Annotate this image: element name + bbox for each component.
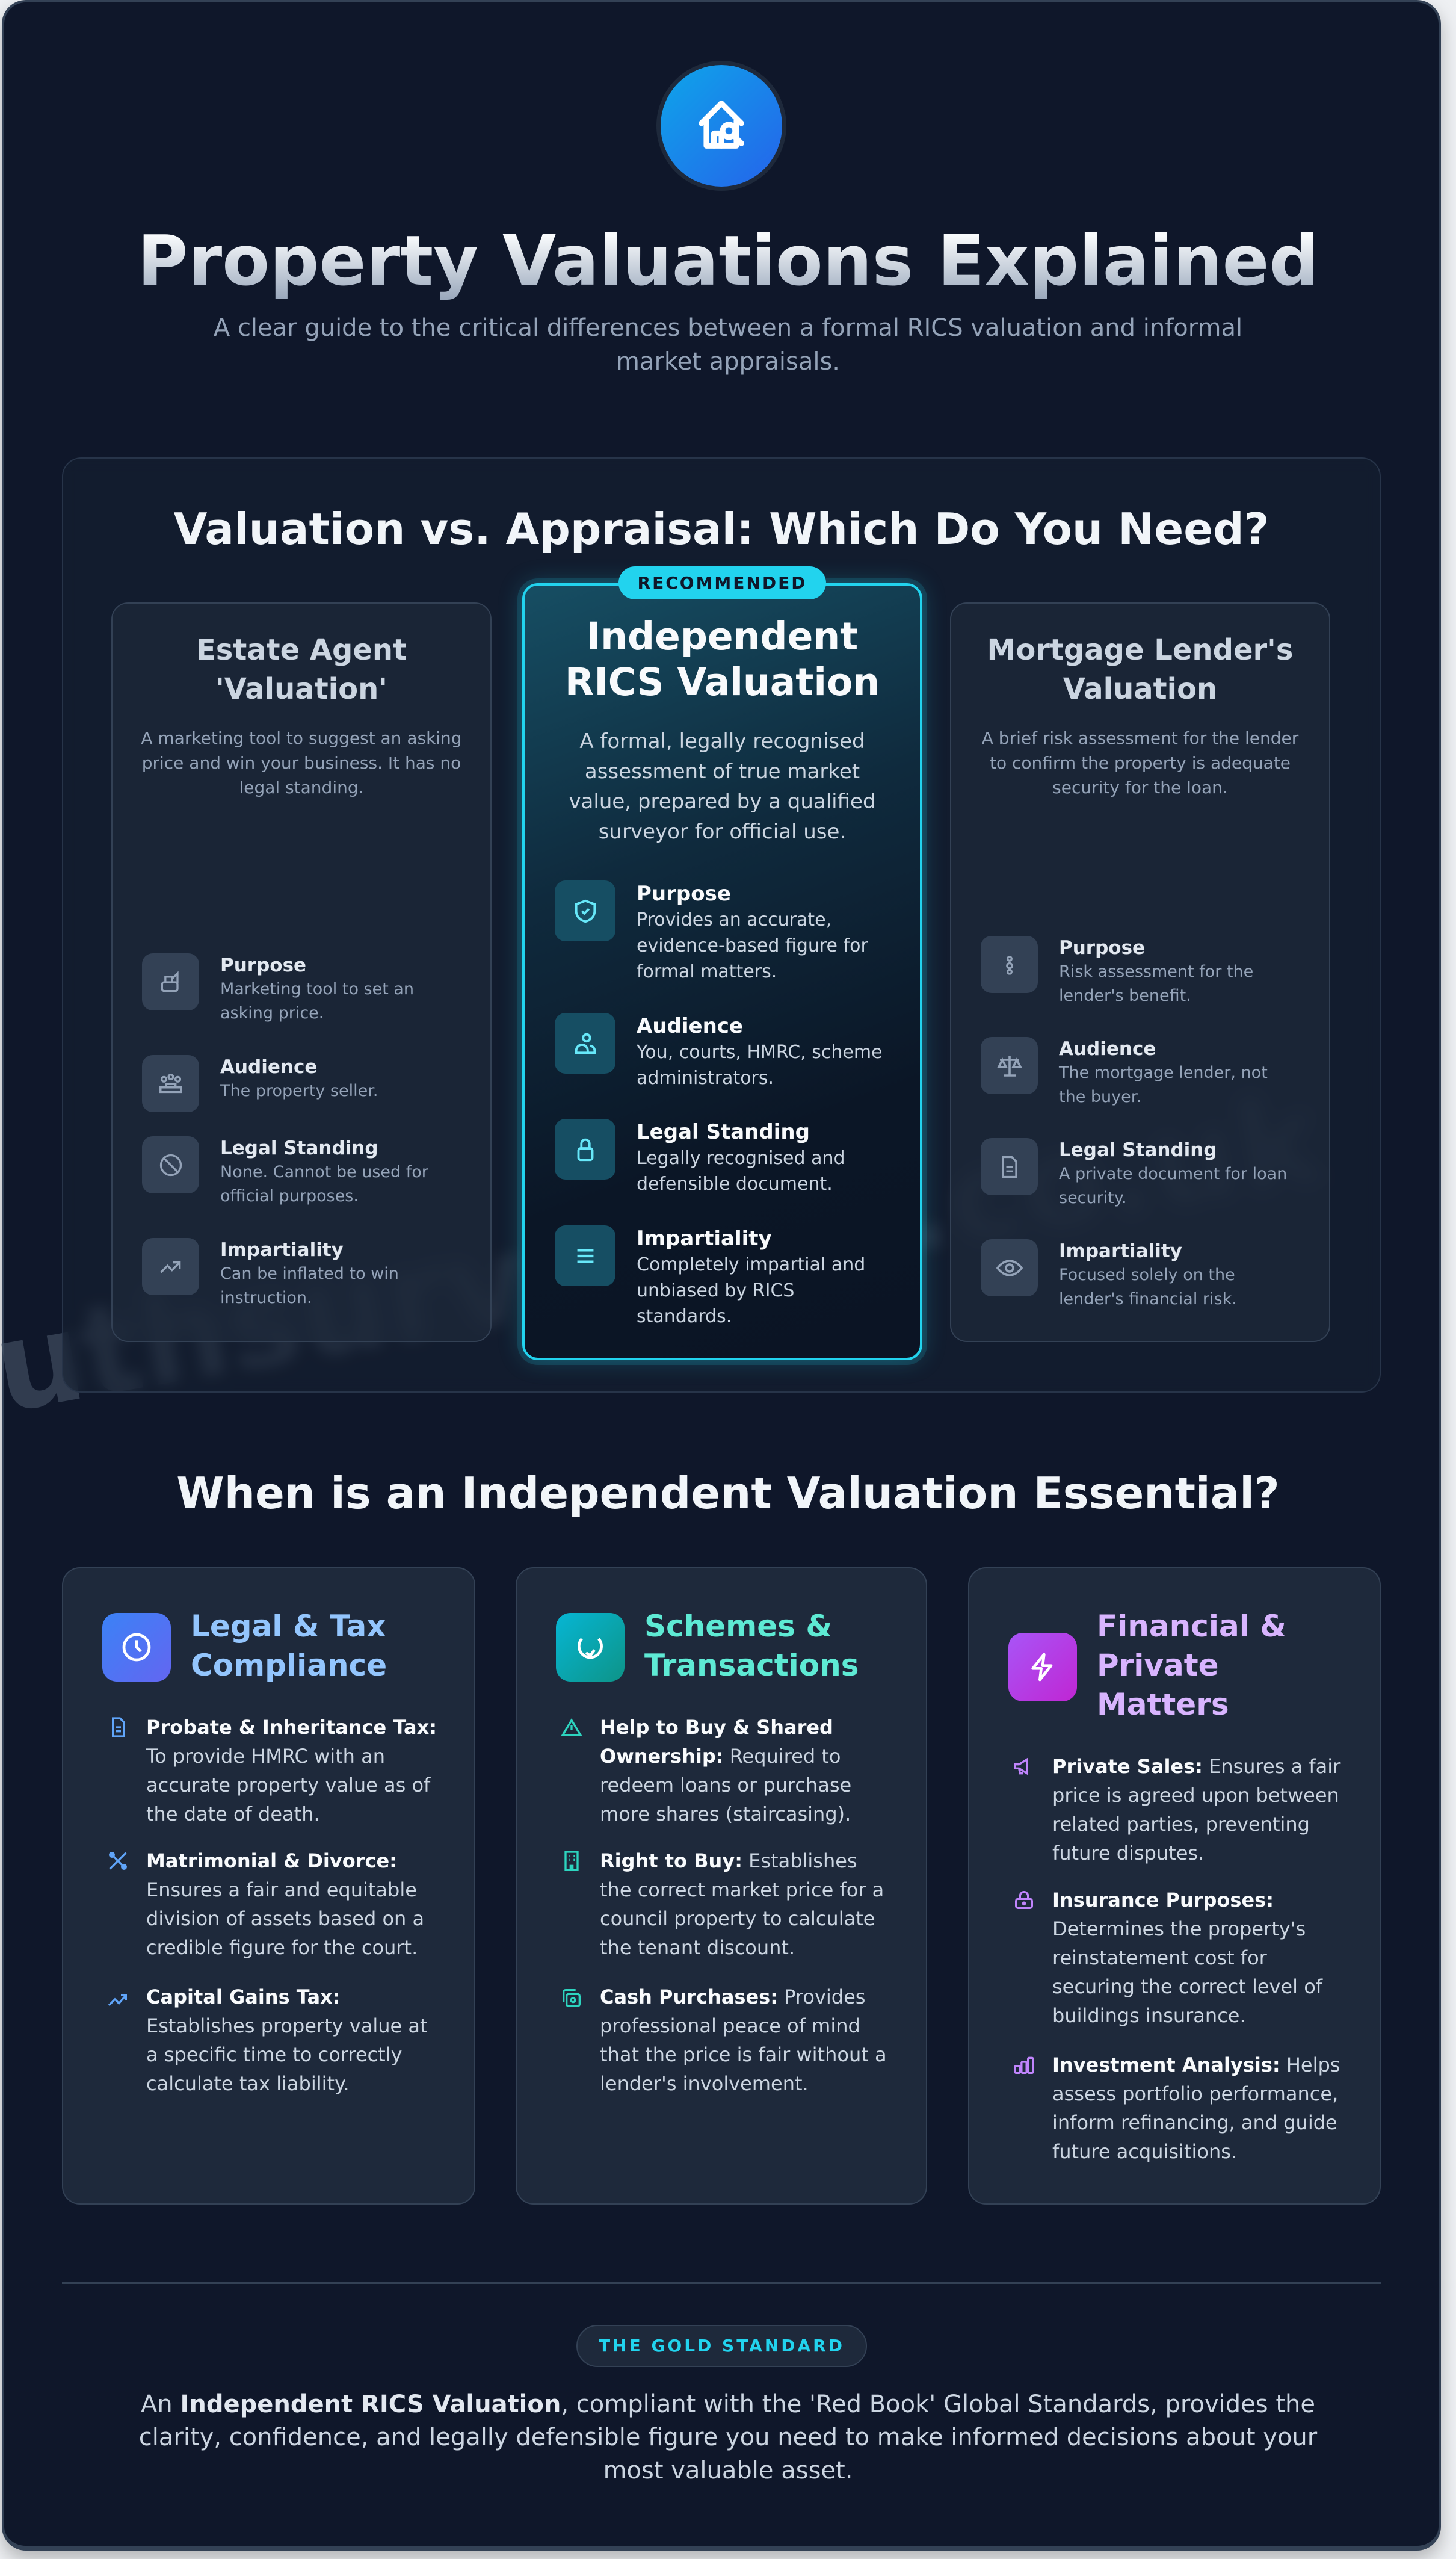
item: investment: inform refinancing, and guide: [1052, 2111, 1337, 2134]
item: impartiality: unbiased by RICS: [637, 1280, 794, 1301]
item: purpose: Marketing tool to set an: [220, 980, 414, 998]
card description: assessment of true market: [585, 760, 860, 784]
card title: Estate Agent: [196, 633, 407, 667]
item: impartiality: lender's financial risk.: [1059, 1290, 1237, 1308]
item: help to buy: [560, 1713, 915, 1828]
item: capital gains: calculate tax liability.: [146, 2072, 350, 2095]
item: purpose: [981, 936, 1253, 1005]
item: impartiality: instruction.: [220, 1289, 312, 1307]
card description: security for the loan.: [1052, 778, 1228, 797]
card title: Matters: [1097, 1687, 1229, 1722]
item: impartiality: [981, 1239, 1237, 1308]
subtitle: market appraisals.: [616, 348, 840, 376]
item: investment: future acquisitions.: [1052, 2140, 1237, 2163]
item: impartiality: [555, 1225, 865, 1327]
card: independent RICS valuation (recommended): [522, 583, 922, 1360]
card title: [644, 1607, 859, 1685]
icon: clock: [102, 1613, 171, 1682]
item: insurance: [1012, 1886, 1367, 2030]
item: impartiality: Can be inflated to win: [220, 1264, 399, 1283]
item: purpose: Risk assessment for the: [1059, 962, 1253, 981]
card title: [565, 614, 880, 704]
item: legal standing: [981, 1138, 1287, 1207]
item: purpose: Purpose: [637, 882, 731, 906]
subtitle: [214, 314, 1242, 376]
item: help to buy: redeem loans or purchase: [600, 1774, 851, 1796]
item: purpose: evidence-based figure for: [637, 935, 868, 956]
card description: A brief risk assessment for the lender: [982, 728, 1298, 748]
item: investment: assess portfolio performance,: [1052, 2082, 1338, 2105]
item: impartiality: Impartiality: [637, 1227, 772, 1251]
badge: the gold standard: THE GOLD STANDARD: [599, 2336, 845, 2356]
item: audience: Audience: [220, 1056, 317, 1078]
logo icon: house: [656, 61, 786, 191]
item: probate: Probate & Inheritance Tax:: [146, 1716, 437, 1739]
item: probate: the date of death.: [146, 1802, 320, 1825]
item: legal standing: A private document for loan: [1059, 1165, 1287, 1183]
item: private sales: future disputes.: [1052, 1842, 1204, 1864]
card title: 'Valuation': [215, 672, 387, 706]
card title: RICS Valuation: [565, 660, 880, 704]
item: impartiality: Completely impartial and: [637, 1254, 865, 1275]
item: audience: the buyer.: [1059, 1088, 1141, 1106]
item: audience: [981, 1037, 1268, 1106]
closing statement: [0, 2388, 1456, 2487]
item: purpose: [142, 953, 414, 1023]
item: right to buy: Right to Buy: Establishes: [600, 1849, 857, 1872]
item: audience: [555, 1013, 883, 1089]
item: impartiality: Impartiality: [220, 1239, 344, 1261]
badge: recommended: RECOMMENDED: [638, 573, 807, 593]
item: legal standing: [142, 1136, 428, 1205]
badge: the gold standard: [576, 2325, 867, 2367]
item: purpose: formal matters.: [637, 961, 777, 982]
item: private sales: [1012, 1752, 1367, 1867]
card title: Mortgage Lender's: [987, 633, 1293, 667]
closing statement: most valuable asset.: [603, 2457, 853, 2484]
item: audience: administrators.: [637, 1068, 774, 1089]
item: legal standing: Legally recognised and: [637, 1148, 845, 1169]
item: legal standing: Legal Standing: [220, 1137, 378, 1159]
closing statement: clarity, confidence, and legally defensible figure you need to make informed decisions about your: [139, 2424, 1317, 2451]
item: cash purchases: Cash Purchases: Provides: [600, 1985, 865, 2008]
item: legal standing: official purposes.: [220, 1187, 359, 1205]
card description: legal standing.: [239, 778, 364, 797]
item: audience: You, courts, HMRC, scheme: [637, 1042, 883, 1063]
card title: [191, 1609, 387, 1683]
card title: Financial &: [1097, 1609, 1286, 1644]
card title: Compliance: [191, 1648, 387, 1683]
item: impartiality: standards.: [637, 1306, 732, 1327]
item: help to buy: Help to Buy & Shared: [600, 1716, 833, 1739]
card description: price and win your business. It has no: [142, 753, 461, 773]
item: insurance: Insurance Purposes:: [1052, 1889, 1274, 1911]
item: probate: accurate property value as of: [146, 1774, 430, 1796]
item: private sales: Private Sales: Ensures a fair: [1052, 1755, 1340, 1778]
item: impartiality: Impartiality: [1059, 1240, 1182, 1262]
card title: [196, 633, 407, 706]
card description: to confirm the property is adequate: [990, 753, 1291, 773]
item: purpose: Provides an accurate,: [637, 909, 831, 930]
item: cash purchases: professional peace of mind: [600, 2014, 860, 2037]
item: matrimonial: Matrimonial & Divorce:: [146, 1849, 397, 1872]
item: investment: Investment Analysis: Helps: [1052, 2053, 1340, 2076]
item: audience: The property seller.: [220, 1081, 378, 1100]
card title: Legal & Tax: [191, 1609, 386, 1644]
item: legal standing: Legal Standing: [637, 1120, 810, 1144]
item: help to buy: more shares (staircasing).: [600, 1802, 851, 1825]
item: purpose: [555, 880, 868, 982]
card title: Schemes &: [644, 1609, 832, 1644]
panel: valuation vs appraisal: [62, 457, 1381, 1393]
card title: Independent: [587, 614, 858, 658]
item: legal standing: defensible document.: [637, 1174, 833, 1195]
item: audience: [142, 1055, 378, 1112]
card title: Valuation: [1063, 672, 1217, 706]
item: legal standing: security.: [1059, 1189, 1127, 1207]
item: capital gains: Establishes property value at: [146, 2014, 428, 2037]
card: mortgage lender's valuation: [950, 602, 1330, 1342]
item: purpose: Purpose: [1059, 937, 1145, 959]
item: private sales: price is agreed upon between: [1052, 1784, 1339, 1807]
item: insurance: Determines the property's: [1052, 1917, 1306, 1940]
card description: A formal, legally recognised: [579, 729, 865, 753]
card: legal & tax compliance: [62, 1567, 475, 2205]
icon: hand: [556, 1613, 625, 1682]
item: insurance: reinstatement cost for: [1052, 1946, 1267, 1969]
card title: Transactions: [644, 1648, 859, 1683]
item: audience: The mortgage lender, not: [1059, 1063, 1268, 1082]
badge: recommended: [618, 566, 826, 599]
item: matrimonial: Ensures a fair and equitable: [146, 1878, 417, 1901]
item: probate: To provide HMRC with an: [146, 1745, 385, 1768]
item: investment: [1012, 2050, 1367, 2166]
item: legal standing: Legal Standing: [1059, 1139, 1217, 1161]
item: cash purchases: [560, 1982, 915, 2098]
item: matrimonial: division of assets based on a: [146, 1907, 424, 1930]
item: right to buy: the correct market price for a: [600, 1878, 884, 1901]
item: right to buy: [560, 1846, 915, 1962]
item: insurance: buildings insurance.: [1052, 2004, 1246, 2027]
card description: surveyor for official use.: [599, 820, 846, 844]
item: insurance: securing the correct level of: [1052, 1975, 1322, 1998]
item: legal standing: None. Cannot be used for: [220, 1163, 428, 1181]
card description: value, prepared by a qualified: [569, 790, 876, 814]
card description: A marketing tool to suggest an asking: [141, 728, 462, 748]
item: purpose: Purpose: [220, 955, 306, 976]
item: private sales: related parties, preventing: [1052, 1813, 1310, 1836]
heading: valuation vs appraisal: Valuation vs. Appraisal: Which Do You Need?: [174, 504, 1269, 554]
item: legal standing: [555, 1119, 845, 1195]
card title: [1097, 1607, 1286, 1724]
item: right to buy: the tenant discount.: [600, 1936, 795, 1959]
item: matrimonial: [106, 1846, 461, 1962]
title: Property Valuations Explained: [137, 221, 1319, 302]
card: estate agent valuation: [111, 602, 492, 1342]
item: cash purchases: that the price is fair without a: [600, 2043, 887, 2066]
card description: [982, 728, 1298, 797]
item: cash purchases: lender's involvement.: [600, 2072, 809, 2095]
item: matrimonial: credible figure for the court.: [146, 1936, 418, 1959]
card description: [569, 729, 876, 844]
subtitle: A clear guide to the critical differences between a formal RICS valuation and informal: [214, 314, 1242, 342]
item: capital gains: [106, 1982, 461, 2098]
item: purpose: lender's benefit.: [1059, 986, 1191, 1005]
item: impartiality: Focused solely on the: [1059, 1266, 1235, 1284]
item: probate: [106, 1713, 461, 1828]
item: impartiality: [142, 1238, 399, 1307]
item: right to buy: council property to calculate: [600, 1907, 875, 1930]
item: purpose: asking price.: [220, 1004, 324, 1023]
item: help to buy: Ownership: Required to: [600, 1745, 841, 1768]
item: audience: Audience: [637, 1014, 743, 1038]
card: schemes & transactions: [516, 1567, 927, 2205]
heading: when is an independent valuation essential: When is an Independent Valuation Essential?: [176, 1468, 1280, 1518]
card: financial & private matters: [968, 1567, 1381, 2205]
closing statement: An Independent RICS Valuation, compliant with the 'Red Book' Global Standards, provides the: [141, 2390, 1315, 2418]
card title: Private: [1097, 1648, 1219, 1683]
card description: [141, 728, 462, 797]
icon: lightning: [1008, 1633, 1077, 1701]
item: capital gains: Capital Gains Tax:: [146, 1985, 340, 2008]
card title: [987, 633, 1293, 706]
item: audience: Audience: [1059, 1038, 1156, 1060]
item: capital gains: a specific time to correctly: [146, 2043, 402, 2066]
